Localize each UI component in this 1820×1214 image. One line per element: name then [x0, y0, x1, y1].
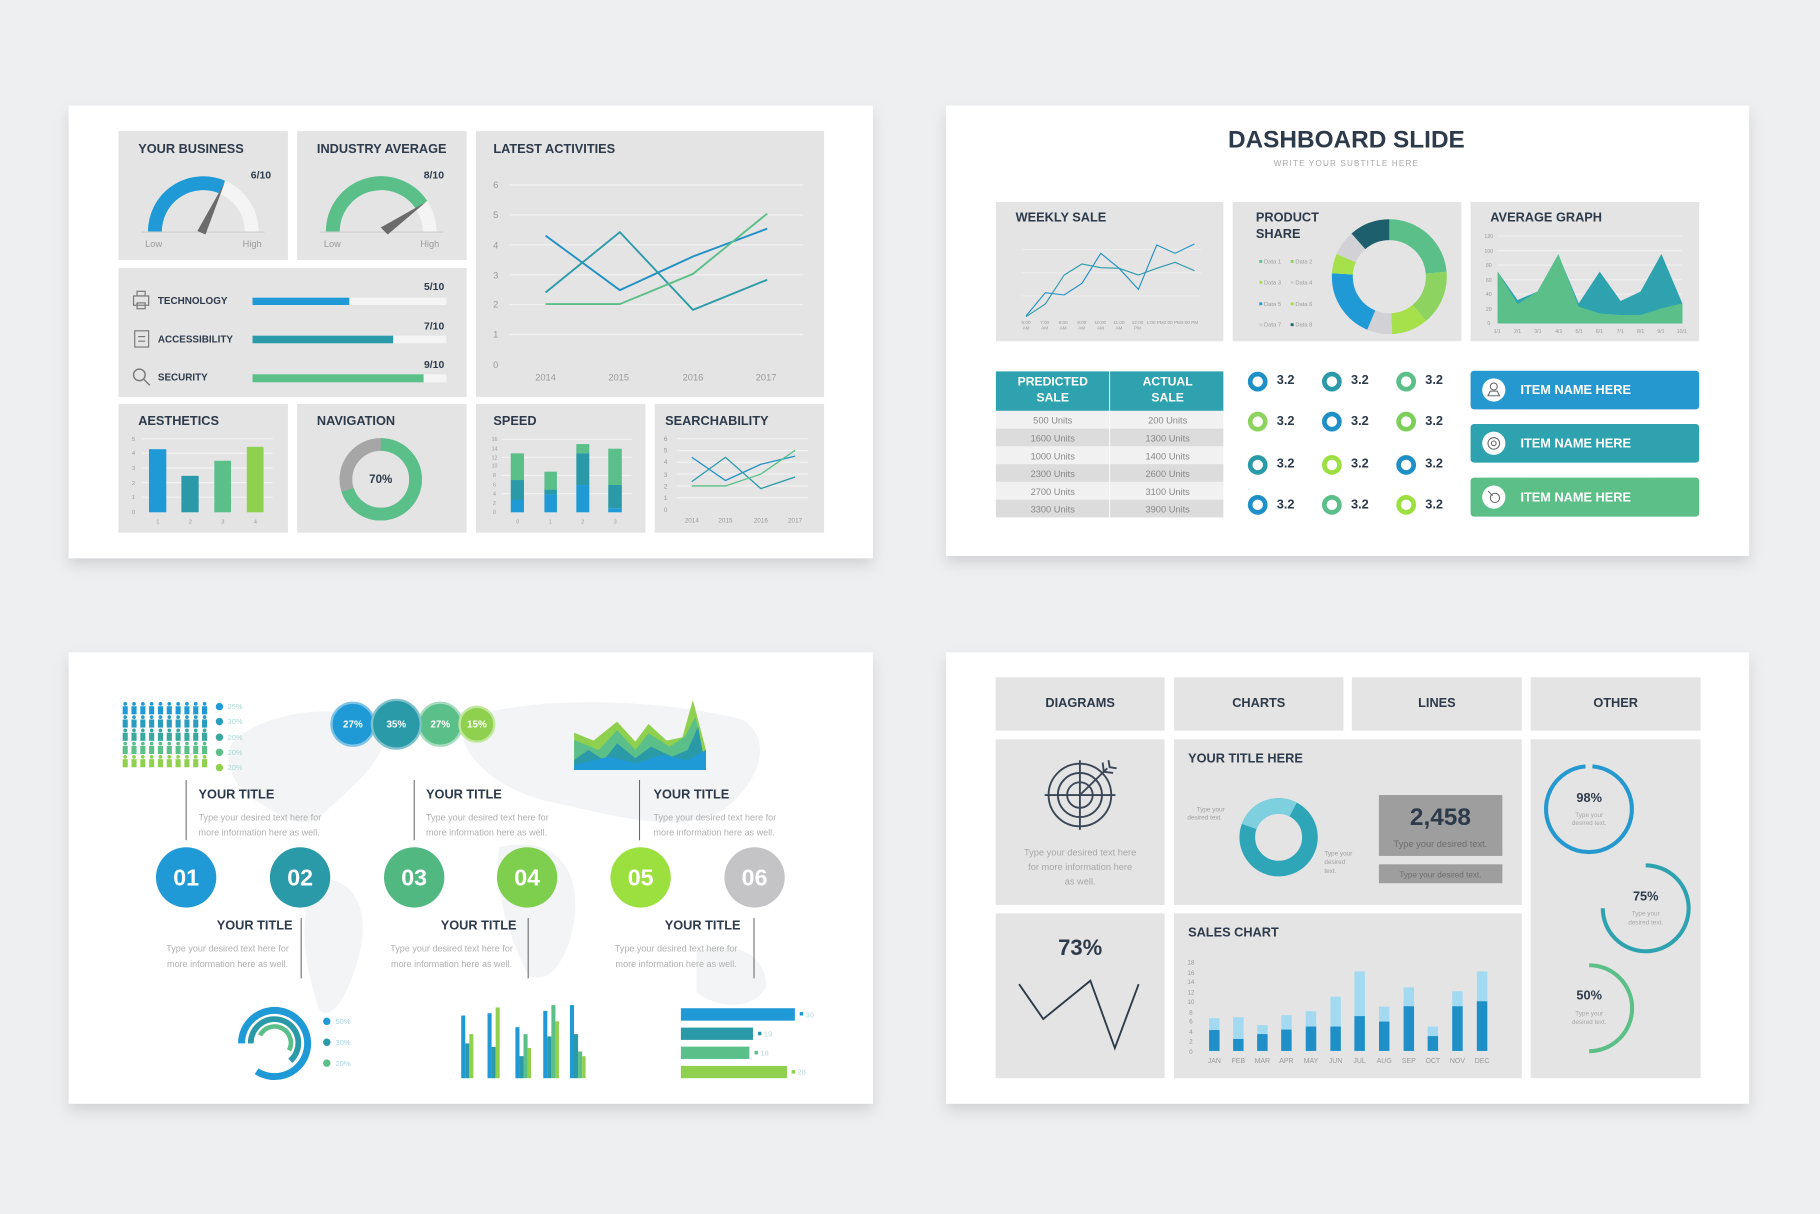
text blocks: lower titles: more information here as well.: [391, 959, 512, 969]
panel: speed stacked bars: 0: [516, 519, 519, 525]
panel: aesthetics bar chart: 1: [132, 495, 135, 501]
panel: weekly sale: 12:00: [1132, 320, 1144, 325]
panel: searchability line chart: 6: [664, 436, 668, 443]
panel: industry average gauge: [297, 131, 467, 260]
panel: navigation donut: NAVIGATION: [317, 413, 395, 428]
chart: percentage bubbles: [331, 700, 494, 749]
text blocks: upper titles: YOUR TITLE: [199, 787, 274, 802]
panel: aesthetics bar chart: 0: [132, 510, 135, 516]
numbered circles 01-06: 06: [742, 865, 768, 891]
panel: product share donut: PRODUCT: [1256, 210, 1319, 225]
panel: weekly sale: AM: [1078, 326, 1085, 331]
panel: sales table: PREDICTED: [1018, 374, 1088, 388]
panel: product share donut: Data 4: [1295, 280, 1313, 286]
panel: average graph area chart: 40: [1486, 292, 1492, 298]
chart: partial radial donut: 50%: [335, 1017, 351, 1026]
panel: sales chart: JAN: [1208, 1058, 1221, 1065]
panel: progress bars: 5/10: [424, 282, 444, 293]
buttons: item names: ITEM NAME HERE: [1520, 435, 1631, 450]
tabs: category headers: [996, 677, 1701, 731]
chart: partial radial donut: 30%: [335, 1038, 351, 1047]
panel: searchability line chart: 4: [664, 459, 668, 466]
icon: magnifier: [134, 369, 150, 385]
panel: aesthetics bar chart: 5: [132, 437, 135, 443]
subtitle: WRITE YOUR SUBTITLE HERE: [1274, 159, 1419, 168]
panel: progress bars: [118, 268, 467, 397]
panel: other progress rings: desired text.: [1572, 1019, 1607, 1026]
numbered circles 01-06: 02: [287, 865, 313, 891]
panel: average graph area chart: 100: [1484, 249, 1493, 255]
panel: navigation donut: [297, 404, 467, 533]
panel: sales table: 3900 Units: [1146, 505, 1190, 515]
panel: latest activities line chart: 1: [493, 330, 498, 340]
panel: average graph area chart: 10/1: [1677, 329, 1687, 335]
panel: your title here: 2,458: [1410, 804, 1471, 831]
panel: your business gauge: YOUR BUSINESS: [138, 141, 244, 156]
panel: speed stacked bars: 6: [493, 482, 496, 488]
panel: aesthetics bar chart: 2: [132, 481, 135, 487]
panel: progress bars: 9/10: [424, 360, 444, 371]
panel: speed stacked bars: 4: [493, 492, 496, 498]
numbered circles 01-06: 03: [401, 865, 427, 891]
panel: searchability line chart: 2016: [754, 517, 768, 524]
buttons: item names: ITEM NAME HERE: [1520, 489, 1631, 504]
panel: product share donut: Data 8: [1295, 323, 1312, 329]
ring value grid: 3.2: [1277, 413, 1294, 428]
ring value grid: 3.2: [1277, 372, 1294, 387]
panel: other progress rings: desired text.: [1572, 820, 1607, 827]
panel: sales table: 200 Units: [1148, 416, 1188, 426]
panel: sales table: 500 Units: [1033, 416, 1073, 426]
panel: average graph area chart: 120: [1484, 234, 1493, 240]
panel: progress bars: ACCESSIBILITY: [158, 334, 233, 345]
slide 3: world map timeline infographic: [69, 652, 873, 1104]
numbered circles 01-06: [156, 847, 785, 908]
panel: latest activities line chart: 2017: [756, 373, 776, 383]
panel: sales table: 3100 Units: [1146, 487, 1190, 497]
panel: speed stacked bars: 10: [492, 464, 497, 470]
panel: sales chart: FEB: [1232, 1058, 1245, 1065]
panel: diagrams target: [996, 739, 1165, 905]
panel: industry average gauge: High: [420, 239, 439, 249]
panel: your title here: text.: [1324, 868, 1337, 875]
chart: grouped bars: [461, 1005, 586, 1078]
text blocks: upper titles: more information here as well.: [199, 828, 320, 838]
panel: average graph area chart: 20: [1486, 307, 1492, 313]
panel: your title here: desired: [1324, 859, 1346, 866]
panel: sales chart: AUG: [1377, 1058, 1392, 1065]
tabs: category headers: OTHER: [1593, 695, 1638, 710]
chart: percentage bubbles: 35%: [386, 720, 406, 731]
chart: horizontal bars: [681, 1008, 814, 1078]
panel: weekly sale: WEEKLY SALE: [1016, 210, 1106, 225]
panel: sales table: 1300 Units: [1146, 434, 1190, 444]
text blocks: upper titles: YOUR TITLE: [426, 787, 502, 802]
buttons: item names: [1471, 371, 1699, 517]
chart: horizontal bars: 18: [760, 1049, 769, 1058]
panel: weekly sale: AM: [1060, 326, 1067, 331]
panel: product share donut: Data 2: [1295, 259, 1312, 265]
chart: layered area: [574, 700, 706, 770]
panel: latest activities line chart: LATEST ACTIVITIES: [493, 141, 615, 156]
panel: navigation donut: 70%: [369, 473, 392, 486]
panel: average graph area chart: 8/1: [1637, 329, 1644, 335]
panel: weekly sale: 1:00 PM2:00 PM3:00 PM: [1146, 320, 1198, 325]
panel: speed stacked bars: [476, 404, 645, 533]
panel: weekly sale: [996, 202, 1223, 341]
panel: sales table: SALE: [1037, 391, 1069, 405]
panel: weekly sale: AM: [1097, 326, 1104, 331]
panel: sales chart: APR: [1279, 1058, 1294, 1065]
panel: aesthetics bar chart: [118, 404, 288, 533]
title: DASHBOARD SLIDE: [1228, 126, 1465, 153]
chart: horizontal bars: 28: [797, 1068, 806, 1077]
panel: diagrams target: Type your desired text here: [1024, 847, 1136, 857]
ring value grid: 3.2: [1425, 372, 1443, 387]
panel: your business gauge: Low: [145, 239, 162, 249]
panel: speed stacked bars: 16: [492, 437, 497, 443]
panel: progress bars: 7/10: [424, 322, 444, 333]
panel: speed stacked bars: 3: [614, 519, 617, 525]
chart: people pictogram: [123, 702, 243, 772]
chart: horizontal bars: 30: [806, 1010, 814, 1019]
panel: sales chart: SEP: [1402, 1058, 1416, 1065]
icon: printer: [134, 291, 149, 309]
panel: sales table: SALE: [1151, 391, 1184, 405]
panel: sales chart: DEC: [1475, 1058, 1489, 1065]
chart: partial radial donut: [241, 1010, 351, 1077]
tabs: category headers: CHARTS: [1232, 695, 1285, 710]
panel: other progress rings: Type your: [1575, 812, 1604, 819]
text blocks: upper titles: more information here as well.: [654, 828, 775, 838]
text blocks: upper titles: more information here as well.: [426, 828, 547, 838]
panel: searchability line chart: SEARCHABILITY: [665, 413, 769, 428]
panel: aesthetics bar chart: 3: [132, 466, 135, 472]
panel: product share donut: Data 7: [1264, 323, 1281, 329]
chart: people pictogram: 30%: [228, 717, 243, 726]
panel: latest activities line chart: 5: [493, 210, 498, 220]
chart: percentage bubbles: 15%: [467, 720, 487, 731]
panel: other progress rings: [1531, 739, 1701, 1078]
panel: searchability line chart: [655, 404, 824, 533]
tabs: category headers: LINES: [1418, 695, 1456, 710]
panel: latest activities line chart: 2: [493, 300, 498, 310]
panel: sales chart: SALES CHART: [1188, 925, 1279, 940]
panel: average graph area chart: 2/1: [1514, 329, 1521, 335]
panel: sales chart: 6: [1189, 1019, 1193, 1026]
panel: sales chart: 10: [1187, 999, 1195, 1006]
chart: percentage bubbles: 27%: [343, 720, 363, 731]
panel: sales table: [996, 371, 1223, 518]
numbered circles 01-06: 04: [514, 865, 540, 891]
text blocks: lower titles: YOUR TITLE: [665, 918, 741, 933]
panel: product share donut: [1233, 202, 1461, 341]
panel: your title here: Type your desired text.: [1394, 839, 1487, 849]
slide 4: categories dashboard: [946, 652, 1749, 1104]
panel: sales chart: 8: [1189, 1009, 1193, 1016]
panel: searchability line chart: 1: [664, 495, 668, 502]
panel: sales chart: 12: [1187, 990, 1195, 997]
panel: sales chart: JUL: [1353, 1058, 1366, 1065]
ring value grid: 3.2: [1425, 456, 1443, 471]
ring value grid: 3.2: [1425, 496, 1443, 511]
ring value grid: 3.2: [1277, 456, 1294, 471]
panel: sales chart: MAY: [1304, 1058, 1319, 1065]
panel: your title here: [1174, 739, 1522, 905]
panel: average graph area chart: 6/1: [1596, 329, 1603, 335]
ring value grid: 3.2: [1351, 372, 1369, 387]
icon: target with arrow: [1045, 760, 1117, 830]
panel: 73% line: 73%: [1058, 935, 1103, 960]
panel: weekly sale: PM: [1134, 326, 1141, 331]
ring value grid: 3.2: [1425, 413, 1443, 428]
slide 2: dashboard slide: [946, 106, 1749, 556]
panel: other progress rings: desired text.: [1628, 919, 1663, 926]
panel: speed stacked bars: 14: [492, 446, 497, 452]
panel: weekly sale: AM: [1023, 326, 1030, 331]
panel: searchability line chart: 2015: [718, 517, 733, 524]
panel: weekly sale: 8:00: [1059, 320, 1068, 325]
panel: weekly sale: 9:00: [1077, 320, 1087, 325]
panel: your title here: desired text.: [1187, 814, 1222, 821]
timeline connector lines: [186, 780, 754, 978]
panel: aesthetics bar chart: 3: [221, 519, 225, 525]
panel: average graph area chart: 5/1: [1575, 329, 1583, 335]
panel: 73% line: [996, 913, 1165, 1078]
panel: sales table: 1600 Units: [1031, 434, 1075, 444]
panel: other progress rings: Type your: [1575, 1011, 1604, 1018]
numbered circles 01-06: 01: [173, 865, 199, 891]
panel: industry average gauge: INDUSTRY AVERAGE: [317, 141, 447, 156]
panel: product share donut: Data 1: [1264, 259, 1281, 265]
panel: industry average gauge: 8/10: [424, 171, 444, 182]
panel: sales chart: JUN: [1329, 1058, 1342, 1065]
chart: percentage bubbles: 27%: [430, 720, 450, 731]
ring value grid: 3.2: [1351, 456, 1369, 471]
panel: speed stacked bars: 8: [493, 473, 496, 479]
panel: progress bars: TECHNOLOGY: [158, 296, 228, 307]
panel: weekly sale: 10:00: [1095, 320, 1107, 325]
panel: other progress rings: 50%: [1576, 987, 1602, 1002]
panel: industry average gauge: Low: [324, 239, 341, 249]
buttons: item names: ITEM NAME HERE: [1520, 382, 1631, 397]
panel: sales table: 2700 Units: [1031, 487, 1075, 497]
panel: average graph area chart: 60: [1486, 278, 1492, 284]
panel: latest activities line chart: 4: [493, 240, 498, 250]
text blocks: lower titles: Type your desired text here for: [615, 944, 737, 954]
text blocks: upper titles: Type your desired text here for: [654, 813, 776, 823]
panel: sales table: 1400 Units: [1146, 451, 1190, 461]
panel: product share donut: Data 6: [1295, 302, 1312, 308]
panel: sales chart: 14: [1187, 979, 1195, 986]
panel: latest activities line chart: 3: [493, 271, 498, 281]
panel: searchability line chart: 3: [664, 472, 668, 479]
panel: average graph area chart: 1/1: [1494, 329, 1501, 335]
panel: latest activities line chart: [476, 131, 824, 397]
panel: your business gauge: [118, 131, 288, 260]
panel: speed stacked bars: 12: [492, 456, 497, 462]
panel: other progress rings: 75%: [1633, 889, 1658, 904]
panel: diagrams target: as well.: [1065, 876, 1096, 886]
panel: speed stacked bars: 2: [493, 501, 496, 507]
panel: sales chart: [1174, 913, 1522, 1078]
panel: speed stacked bars: 0: [493, 510, 496, 516]
panel: your title here: Type your desired text.: [1399, 870, 1481, 879]
panel: searchability line chart: 2: [664, 484, 668, 491]
panel: average graph area chart: 0: [1487, 321, 1490, 327]
panel: sales chart: NOV: [1450, 1058, 1465, 1065]
panel: aesthetics bar chart: 2: [189, 519, 192, 525]
panel: average graph area chart: 9/1: [1657, 329, 1665, 335]
text blocks: lower titles: [166, 918, 741, 969]
chart: people pictogram: 20%: [228, 733, 243, 742]
ring value grid: 3.2: [1351, 496, 1369, 511]
panel: sales table: 3300 Units: [1031, 505, 1075, 515]
ring value grid: 3.2: [1277, 496, 1294, 511]
panel: weekly sale: 7:00: [1040, 320, 1050, 325]
panel: your title here: Type your: [1324, 850, 1353, 857]
panel: latest activities line chart: 6: [493, 180, 498, 190]
panel: speed stacked bars: 2: [581, 519, 584, 525]
panel: average graph area chart: 7/1: [1617, 329, 1624, 335]
panel: product share donut: Data 5: [1264, 302, 1281, 308]
panel: average graph area chart: AVERAGE GRAPH: [1490, 210, 1602, 225]
panel: speed stacked bars: 1: [549, 519, 552, 525]
panel: average graph area chart: 80: [1486, 263, 1492, 269]
text blocks: upper titles: Type your desired text here for: [426, 813, 549, 823]
text blocks: lower titles: YOUR TITLE: [217, 918, 293, 933]
panel: aesthetics bar chart: 4: [132, 451, 136, 457]
panel: other progress rings: Type your: [1632, 911, 1661, 918]
panel: your business gauge: High: [243, 239, 262, 249]
panel: aesthetics bar chart: 4: [254, 519, 258, 525]
panel: latest activities line chart: 2016: [683, 373, 703, 383]
panel: sales chart: 2: [1189, 1038, 1193, 1045]
slide 1: scorecard dashboard: [69, 106, 873, 558]
panel: sales chart: 18: [1187, 959, 1195, 966]
panel: product share donut: SHARE: [1256, 226, 1301, 241]
chart: people pictogram: 25%: [228, 702, 243, 711]
panel: searchability line chart: 2017: [788, 517, 803, 524]
panel: weekly sale: 6:00: [1022, 320, 1031, 325]
panel: searchability line chart: 0: [664, 507, 668, 514]
panel: latest activities line chart: 2014: [535, 373, 556, 383]
panel: searchability line chart: 5: [664, 448, 668, 455]
panel: aesthetics bar chart: AESTHETICS: [138, 413, 219, 428]
panel: your title here: Type your: [1197, 806, 1226, 813]
panel: speed stacked bars: SPEED: [493, 413, 537, 428]
panel: weekly sale: AM: [1115, 326, 1123, 331]
text blocks: lower titles: more information here as well.: [167, 959, 288, 969]
panel: average graph area chart: 4/1: [1555, 329, 1563, 335]
panel: latest activities line chart: 2015: [608, 373, 629, 383]
panel: sales chart: 0: [1189, 1049, 1193, 1056]
panel: product share donut: Data 3: [1264, 280, 1281, 286]
text blocks: lower titles: Type your desired text here for: [166, 944, 289, 954]
panel: searchability line chart: 2014: [685, 517, 699, 524]
panel: aesthetics bar chart: 1: [156, 519, 160, 525]
panel: sales table: 2600 Units: [1146, 469, 1190, 479]
panel: sales table: ACTUAL: [1143, 374, 1193, 388]
chart: partial radial donut: 20%: [335, 1059, 351, 1068]
panel: average graph area chart: 3/1: [1534, 329, 1542, 335]
panel: average graph area chart: [1471, 202, 1699, 341]
panel: progress bars: SECURITY: [158, 373, 208, 384]
panel: your title here: YOUR TITLE HERE: [1188, 751, 1303, 766]
panel: sales chart: 4: [1189, 1029, 1193, 1036]
panel: sales chart: MAR: [1255, 1058, 1270, 1065]
panel: sales table: 2300 Units: [1031, 469, 1075, 479]
text blocks: lower titles: Type your desired text here for: [390, 944, 513, 954]
panel: weekly sale: AM: [1041, 326, 1048, 331]
numbered circles 01-06: 05: [628, 865, 654, 891]
ring value grid: [1250, 372, 1443, 512]
text blocks: upper titles: YOUR TITLE: [654, 787, 729, 802]
text blocks: upper titles: [199, 787, 776, 838]
chart: horizontal bars: 19: [764, 1029, 772, 1038]
panel: latest activities line chart: 0: [493, 360, 498, 370]
world map background: [228, 702, 766, 1013]
chart: people pictogram: 20%: [228, 748, 243, 757]
panel: diagrams target: for more information here: [1028, 862, 1132, 872]
panel: sales chart: 16: [1187, 970, 1195, 977]
ring value grid: 3.2: [1351, 413, 1369, 428]
text blocks: lower titles: more information here as well.: [616, 959, 737, 969]
text blocks: upper titles: Type your desired text here for: [199, 813, 321, 823]
tabs: category headers: DIAGRAMS: [1045, 695, 1115, 710]
panel: other progress rings: 98%: [1576, 790, 1602, 805]
chart: people pictogram: 20%: [228, 763, 243, 772]
panel: your business gauge: 6/10: [251, 171, 271, 182]
panel: sales table: 1000 Units: [1031, 451, 1075, 461]
panel: sales chart: OCT: [1426, 1058, 1441, 1065]
text blocks: lower titles: YOUR TITLE: [441, 918, 517, 933]
panel: weekly sale: 11:00: [1113, 320, 1125, 325]
icon: document: [135, 331, 149, 347]
